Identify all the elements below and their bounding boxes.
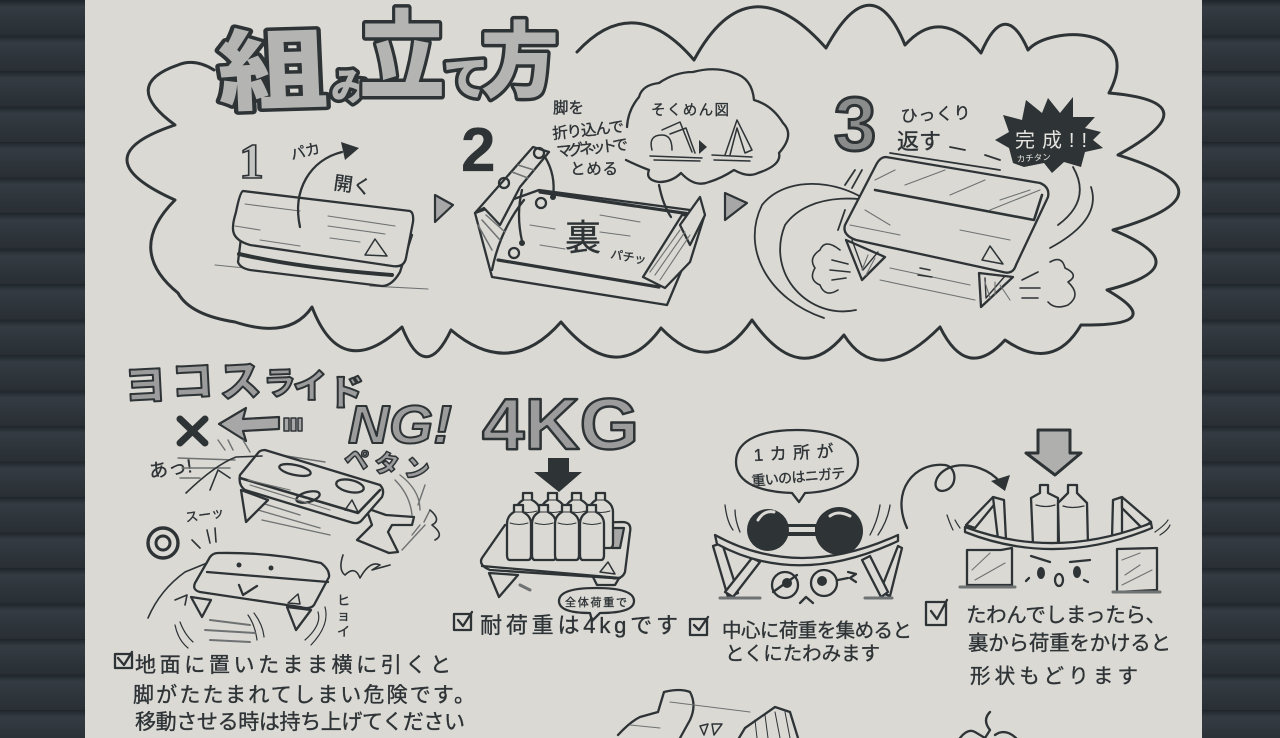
support blocks: [960, 548, 1160, 592]
reverse side label: 裏: [565, 217, 601, 258]
dumbbell: [747, 507, 863, 555]
heading: yoko slide: イ: [293, 368, 327, 406]
heading: yoko slide: ラ: [263, 365, 296, 402]
cropped sketch: bottom centre: [618, 690, 798, 738]
sound: suu: スーッ: [184, 505, 225, 525]
panel: centre load bending: とくにたわみます: [725, 643, 880, 665]
sliding table: [240, 450, 414, 553]
callout: total load: 全体荷重で: [565, 595, 627, 609]
panel: 4kg load limit: [454, 385, 678, 638]
arrow: step 2 to 3: [725, 193, 747, 220]
panel: restoring the shape: 裏から荷重をかけると: [968, 632, 1171, 655]
instruction text: ひっくり: [900, 103, 971, 126]
panel: restoring the shape: 形状もどります: [970, 665, 1138, 688]
warning text: 地面に置いたまま横に引くと: [135, 654, 451, 677]
instruction text: 脚を: [553, 99, 584, 117]
heading: yoko slide: ド: [328, 372, 364, 413]
table with bottles: [481, 493, 630, 597]
bottles on table: [1031, 485, 1088, 546]
panel: no side sliding warning: [115, 357, 475, 734]
title: 組: [216, 22, 330, 123]
side view bubble: [626, 69, 788, 217]
left dust puff: [812, 244, 850, 293]
callout: total load: [559, 588, 634, 621]
icon: checkbox: [454, 612, 472, 630]
lifted table: [191, 553, 329, 630]
panel: assembly steps cloud outline: [127, 5, 1179, 360]
warning text: 脚がたたまれてしまい危険です。: [133, 684, 475, 707]
sound: peta-n: ペタン: [342, 444, 431, 485]
step 3: flip over: [755, 82, 1103, 318]
icon: checkbox: [690, 617, 708, 635]
speech bubble: 重いのはニガテ: [751, 465, 846, 489]
title: [216, 4, 559, 123]
face: [772, 570, 856, 603]
open arrow: [298, 142, 359, 227]
step number 2: 2: [461, 116, 495, 185]
step number 1: 1: [239, 133, 264, 189]
heading: NG: NG!: [348, 395, 452, 455]
water bottles: [507, 493, 613, 560]
step 1: open the table: [215, 133, 428, 289]
icon: cross: [180, 419, 205, 443]
step number 3: 3: [834, 82, 876, 167]
lifting hand: [148, 528, 216, 618]
label: hyoi: [337, 593, 350, 639]
sound: ah: あっ!: [148, 456, 194, 483]
step 2: fold legs in: [461, 69, 788, 305]
arrow: step 1 to 2: [435, 195, 453, 222]
flipping swooshes: [755, 147, 1093, 318]
bent table upside down: [965, 497, 1152, 549]
arrow: slide left: [219, 408, 302, 441]
heading: yoko slide: [123, 357, 364, 413]
label: paka: パカ: [289, 140, 322, 164]
speech bubble: 1カ所が: [753, 442, 834, 465]
warning text: 移動させる時は持ち上げてください: [135, 711, 465, 734]
label: hyoi: ヒ: [337, 593, 350, 608]
motion lines: [947, 515, 1170, 535]
heading: yoko slide: ヨ: [123, 361, 167, 410]
load text: 耐荷重は4kgです: [480, 613, 678, 638]
label: open: 開く: [332, 173, 373, 199]
arrow: down: [534, 458, 582, 492]
instruction text: 折り込んで: [552, 118, 625, 143]
arrow: down grey: [1026, 430, 1081, 475]
instruction text: マグネットで: [556, 136, 629, 161]
title: み: [331, 67, 369, 109]
panel: centre load bending: [690, 430, 912, 665]
title: 立: [359, 4, 445, 111]
lift motion arcs: [175, 607, 326, 648]
heading: yoko slide: コ: [170, 357, 214, 406]
open table underside: [475, 147, 705, 305]
bent table: [713, 535, 902, 598]
hand on table: [186, 456, 262, 493]
icon: checkbox: [115, 652, 132, 668]
title: て: [443, 53, 489, 105]
warning text: [115, 652, 475, 734]
side view label: そくめん図: [651, 102, 729, 119]
impact mark: [341, 510, 439, 578]
title: 方: [481, 16, 559, 107]
cropped sketch: bottom right: [960, 712, 1016, 738]
step 3: flip over: 返す: [897, 129, 941, 154]
panel: restoring the shape: [926, 430, 1171, 688]
description text: たわんでしまったら、: [966, 604, 1166, 627]
right dust puff: [1020, 260, 1075, 307]
arrow: loop to fix: [901, 465, 1010, 528]
completion burst: カチタン: [1016, 152, 1051, 164]
click sound: パチッ: [609, 247, 647, 267]
completed table: [844, 157, 1048, 307]
completion burst: 完成!!: [1015, 129, 1087, 152]
completion burst: [995, 97, 1103, 173]
motion lines: [725, 505, 890, 535]
side view diagrams: [650, 120, 752, 161]
motion lines: [178, 440, 430, 550]
speech bubble: [736, 430, 858, 502]
description text: 中心に荷重を集めると: [722, 620, 912, 642]
face: [1026, 556, 1090, 586]
label: hyoi: ョ: [337, 608, 350, 623]
icon: checkbox: [926, 600, 947, 625]
closed table: [215, 191, 428, 289]
icon: double circle ok: [148, 528, 178, 558]
heading: yoko slide: ス: [218, 357, 262, 406]
heading: 4KG: 4KG: [482, 385, 639, 465]
instruction text: [552, 99, 629, 178]
instruction text: とめる: [570, 161, 618, 178]
label: hyoi: イ: [337, 624, 350, 639]
